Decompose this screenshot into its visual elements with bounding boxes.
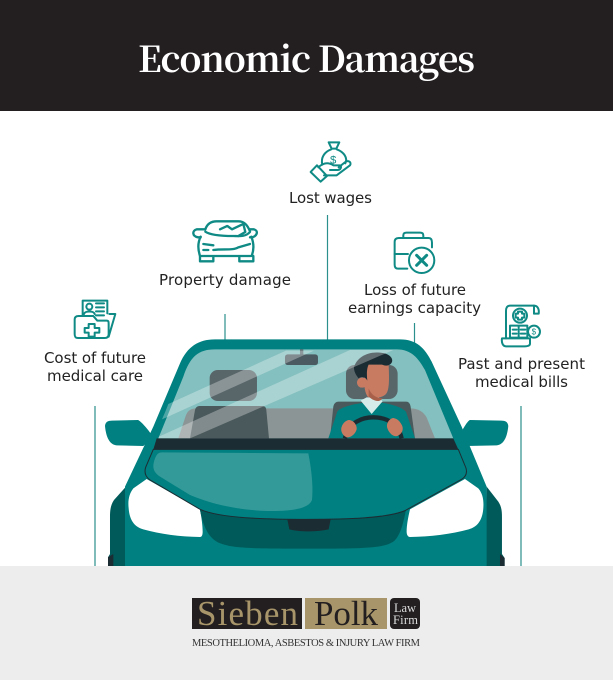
logo: [192, 594, 420, 633]
side fenders: [108, 487, 505, 566]
icon: money bag in hand: $: [330, 155, 337, 167]
hood: [145, 449, 466, 519]
label: Loss of future earnings capacity: earnings capacity: [348, 299, 481, 317]
hood highlight: [153, 452, 312, 511]
icon: medical bill: $: [532, 328, 537, 337]
rear view mirror: [285, 349, 318, 365]
label: Cost of future medical care: [44, 349, 146, 385]
footer band: [0, 566, 613, 680]
label: Loss of future earnings capacity: [348, 281, 481, 317]
icon: money bag in hand: [311, 142, 351, 182]
grille: [200, 510, 406, 549]
logo: Polk: [314, 594, 378, 633]
title: Economic Damages: [138, 32, 475, 83]
logo: Sieben: [197, 594, 298, 633]
label: Loss of future earnings capacity: Loss of future: [364, 281, 466, 299]
icon: medical bill: [502, 306, 540, 346]
windshield glare: [158, 350, 393, 438]
car body: [125, 339, 487, 566]
icon: medical folder: [75, 301, 115, 338]
driver: [328, 352, 415, 438]
tagline: MESOTHELIOMA, ASBESTOS & INJURY LAW FIRM: [192, 638, 421, 649]
label: Past and present medical bills: [458, 355, 585, 391]
icon: damaged car: [193, 221, 257, 261]
grille badge: [287, 519, 331, 531]
label: Cost of future medical care: medical care: [47, 367, 143, 385]
label: Past and present medical bills: Past and present: [458, 355, 585, 373]
icon: briefcase with x: [395, 233, 434, 273]
label: Property damage: Property damage: [159, 271, 291, 289]
dark band: [153, 438, 458, 449]
label: Past and present medical bills: medical bills: [475, 373, 568, 391]
car illustration: [105, 339, 508, 566]
header band: [0, 0, 613, 111]
connector lines: [95, 215, 521, 566]
windshield: [158, 349, 453, 438]
label: Lost wages: Lost wages: [289, 189, 372, 207]
logo: Firm: [393, 613, 418, 627]
label: Cost of future medical care: Cost of future: [44, 349, 146, 367]
headlights: [128, 479, 483, 537]
side mirrors: [105, 420, 508, 446]
logo: Law: [394, 601, 416, 615]
back seats: [178, 365, 435, 438]
